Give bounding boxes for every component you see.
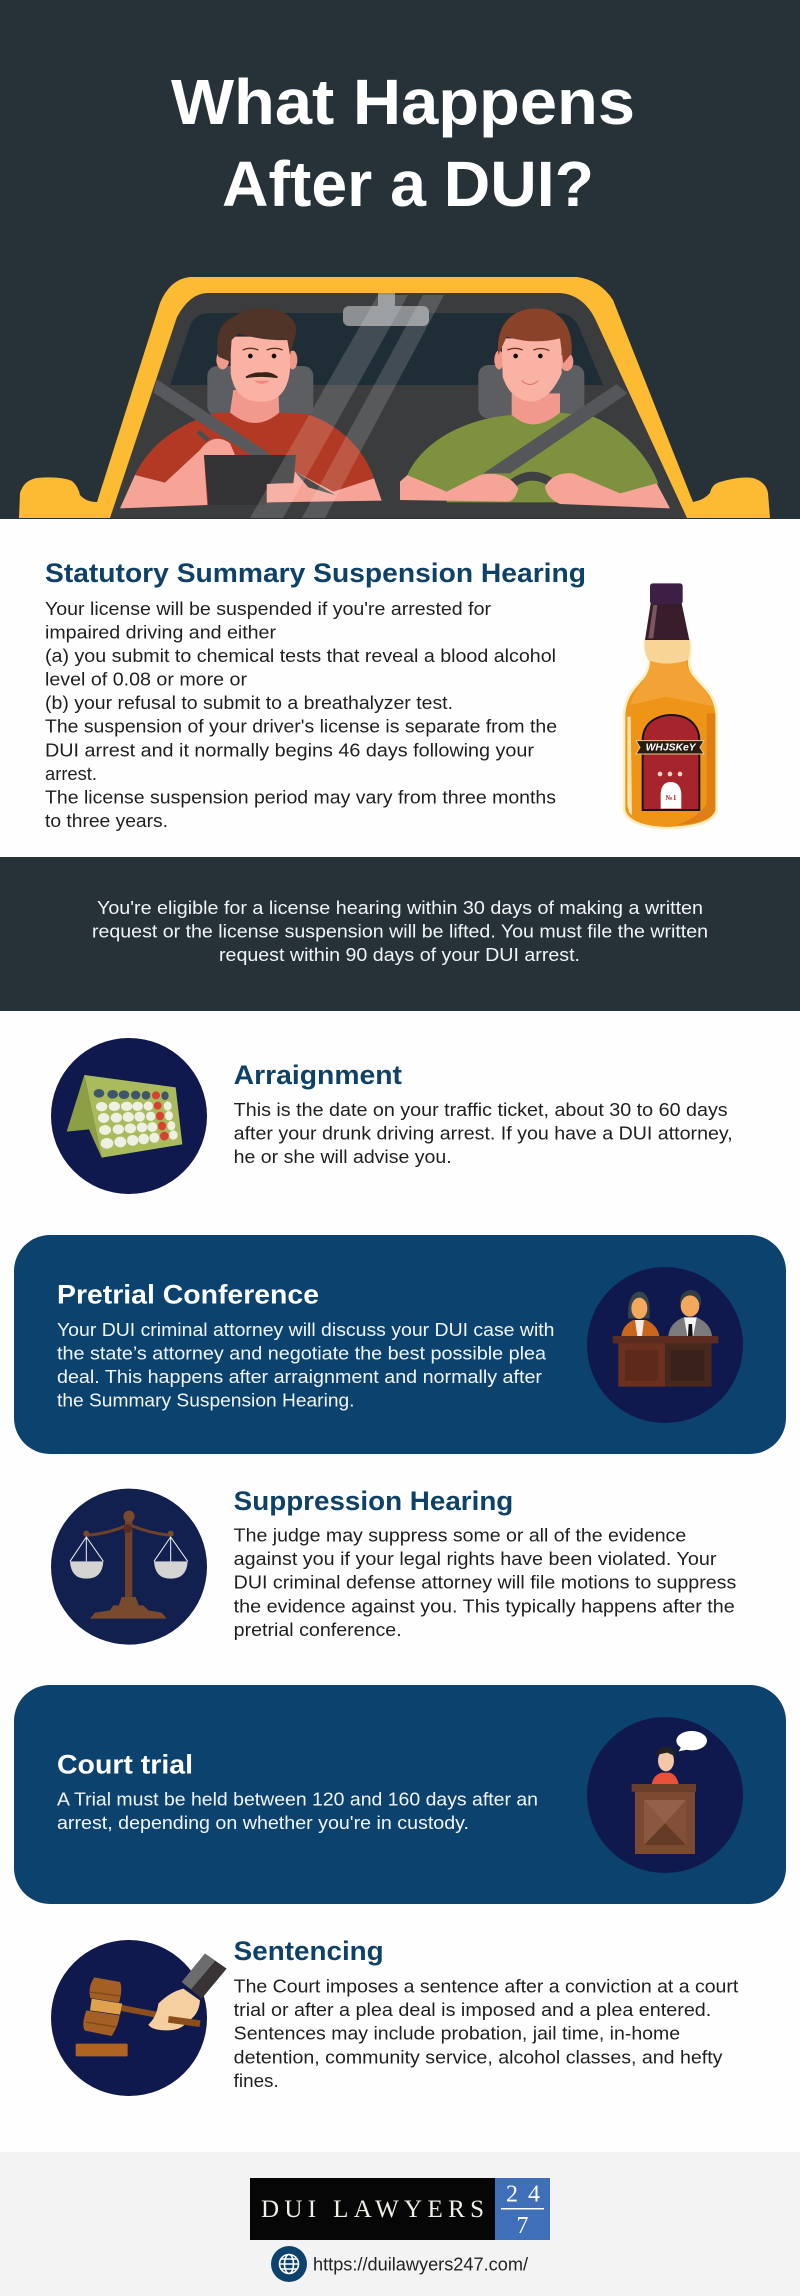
text block: the state’s attorney and negotiate the best possible plea — [57, 1344, 547, 1364]
panel: hero header — [0, 0, 800, 519]
icon: whiskey bottle: WHJSKeY — [646, 743, 697, 754]
text block: he or she will advise you. — [234, 1147, 452, 1167]
icon: whiskey bottle: №1 — [664, 793, 677, 802]
text block: request or the license suspension will be lifted. You must file the written — [92, 922, 708, 942]
text block: DUI arrest and it normally begins 46 days following your — [45, 740, 534, 760]
icon: rear-view mirror — [343, 293, 429, 326]
text block: DUI criminal defense attorney will file motions to suppress — [234, 1573, 736, 1593]
icon: scales of justice — [51, 1489, 207, 1645]
icon: gavel in hand — [51, 1940, 227, 2096]
text block: the evidence against you. This typically happens after the — [234, 1596, 735, 1616]
icon: car frame — [19, 277, 770, 518]
text block: arrest. — [45, 764, 97, 784]
text block: impaired driving and either — [45, 622, 276, 642]
figure: driver in red shirt — [120, 308, 382, 508]
panel: sentencing — [51, 1936, 738, 2096]
panel: arraignment — [51, 1038, 733, 1194]
heading: Statutory Summary Suspension Hearing — [45, 558, 586, 588]
text block: fines. — [234, 2071, 279, 2091]
windshield light streaks — [250, 295, 444, 518]
text block: to three years. — [45, 811, 168, 831]
text block: request within 90 days of your DUI arrest. — [219, 945, 580, 965]
icon: calendar — [51, 1038, 207, 1194]
text block — [57, 1790, 538, 1833]
logo: DUI Lawyers 24/7 — [250, 2178, 550, 2240]
text block: arrest, depending on whether you're in custody. — [57, 1813, 469, 1833]
text block: The suspension of your driver's license is separate from the — [45, 717, 557, 737]
panel: license hearing note — [0, 857, 800, 1011]
text block: The Court imposes a sentence after a conviction at a court — [234, 1977, 738, 1997]
text block — [234, 1977, 738, 2091]
heading: Arraignment — [234, 1060, 402, 1090]
text block: detention, community service, alcohol classes, and hefty — [234, 2047, 722, 2067]
illustration: two men in a car — [19, 277, 770, 518]
icon: whiskey bottle — [624, 583, 717, 828]
text block: Your license will be suspended if you're arrested for — [45, 599, 491, 619]
text block: Sentences may include probation, jail time, in-home — [234, 2024, 680, 2044]
text block: You're eligible for a license hearing within 30 days of making a written — [97, 898, 703, 918]
text block — [234, 1526, 736, 1640]
text block: after your drunk driving arrest. If you have a DUI attorney, — [234, 1124, 733, 1144]
text block — [57, 1320, 554, 1411]
logo: DUI Lawyers 24/7: 24 — [506, 2182, 540, 2208]
logo: DUI Lawyers 24/7: 7 — [516, 2213, 528, 2239]
figure: passenger in green shirt — [400, 308, 670, 508]
text block: against you if your legal rights have been violated. Your — [234, 1549, 716, 1569]
text block — [234, 1100, 733, 1167]
panel: court trial — [14, 1685, 786, 1904]
website address: https://duilawyers247.com/ — [313, 2254, 528, 2274]
icon: speaker at a podium — [587, 1717, 743, 1873]
heading: Suppression Hearing — [234, 1486, 513, 1516]
text block: Your DUI criminal attorney will discuss your DUI case with — [57, 1320, 554, 1340]
text block: (b) your refusal to submit to a breathalyzer test. — [45, 693, 453, 713]
icon: globe — [271, 2246, 307, 2282]
text block: level of 0.08 or more or — [45, 670, 247, 690]
text block — [45, 599, 557, 831]
panel: statutory summary suspension hearing — [45, 558, 717, 831]
text block: the Summary Suspension Hearing. — [57, 1391, 354, 1411]
text block: The license suspension period may vary from three months — [45, 787, 556, 807]
heading: Sentencing — [234, 1936, 384, 1966]
text block: The judge may suppress some or all of the evidence — [234, 1526, 686, 1546]
title: After a DUI? — [222, 148, 594, 220]
icon: two attorneys at a desk — [587, 1267, 743, 1423]
heading: Court trial — [57, 1750, 193, 1780]
text block: pretrial conference. — [234, 1620, 402, 1640]
panel: suppression hearing — [51, 1486, 736, 1645]
title: What Happens — [171, 66, 635, 138]
logo: DUI Lawyers 24/7: DUI LAWYERS — [261, 2196, 484, 2223]
text block: (a) you submit to chemical tests that reveal a blood alcohol — [45, 646, 556, 666]
title — [171, 66, 635, 220]
text block: This is the date on your traffic ticket, about 30 to 60 days — [234, 1100, 728, 1120]
heading: Pretrial Conference — [57, 1280, 319, 1310]
text block: trial or after a plea deal is imposed and a plea entered. — [234, 2000, 711, 2020]
panel: footer — [0, 2152, 800, 2296]
text block — [92, 898, 708, 965]
text block: A Trial must be held between 120 and 160 days after an — [57, 1790, 538, 1810]
text block: deal. This happens after arraignment and normally after — [57, 1367, 542, 1387]
panel: pretrial conference — [14, 1235, 786, 1454]
